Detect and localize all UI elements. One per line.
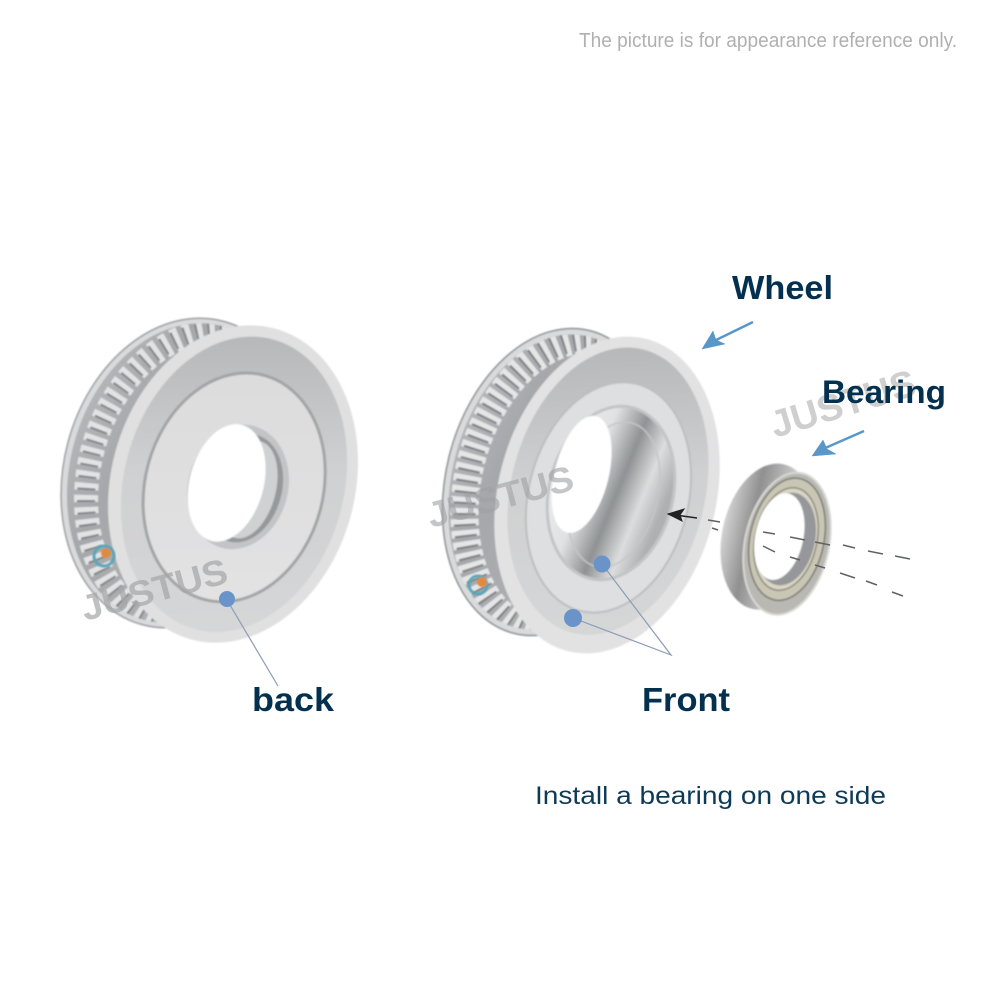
bearing shield and bore [738, 471, 836, 608]
front pulley bore [530, 393, 692, 593]
back pulley toothed body [60, 316, 238, 630]
wheel arrow [702, 322, 753, 349]
assembly axis dashed lines [708, 520, 910, 596]
back pulley photo [60, 316, 358, 643]
front watermark text: JUSTUS [422, 457, 578, 536]
front pulley photo [440, 326, 720, 654]
disclaimer note: The picture is for appearance reference only. [579, 30, 957, 52]
front pulley toothed body [440, 326, 610, 638]
label: Front: Front [642, 681, 730, 718]
bearing arrow [812, 431, 864, 456]
black insertion arrow [668, 509, 697, 521]
front watermark logo [469, 576, 487, 594]
bearing photo [707, 455, 844, 623]
caption: Install a bearing on one side [535, 782, 886, 810]
callout leader lines and dots [219, 556, 671, 686]
label: Wheel: Wheel [732, 269, 833, 306]
back pulley bore [173, 413, 303, 561]
back watermark text: JUSTUS [76, 550, 232, 629]
label: back: back [252, 681, 335, 718]
back watermark logo [94, 546, 114, 566]
label: Bearing: Bearing [822, 374, 946, 410]
back pulley flange [73, 297, 393, 671]
bearing outer ring [707, 455, 844, 623]
bearing watermark text: JUSTUS [765, 363, 921, 447]
front pulley flange [462, 312, 752, 678]
